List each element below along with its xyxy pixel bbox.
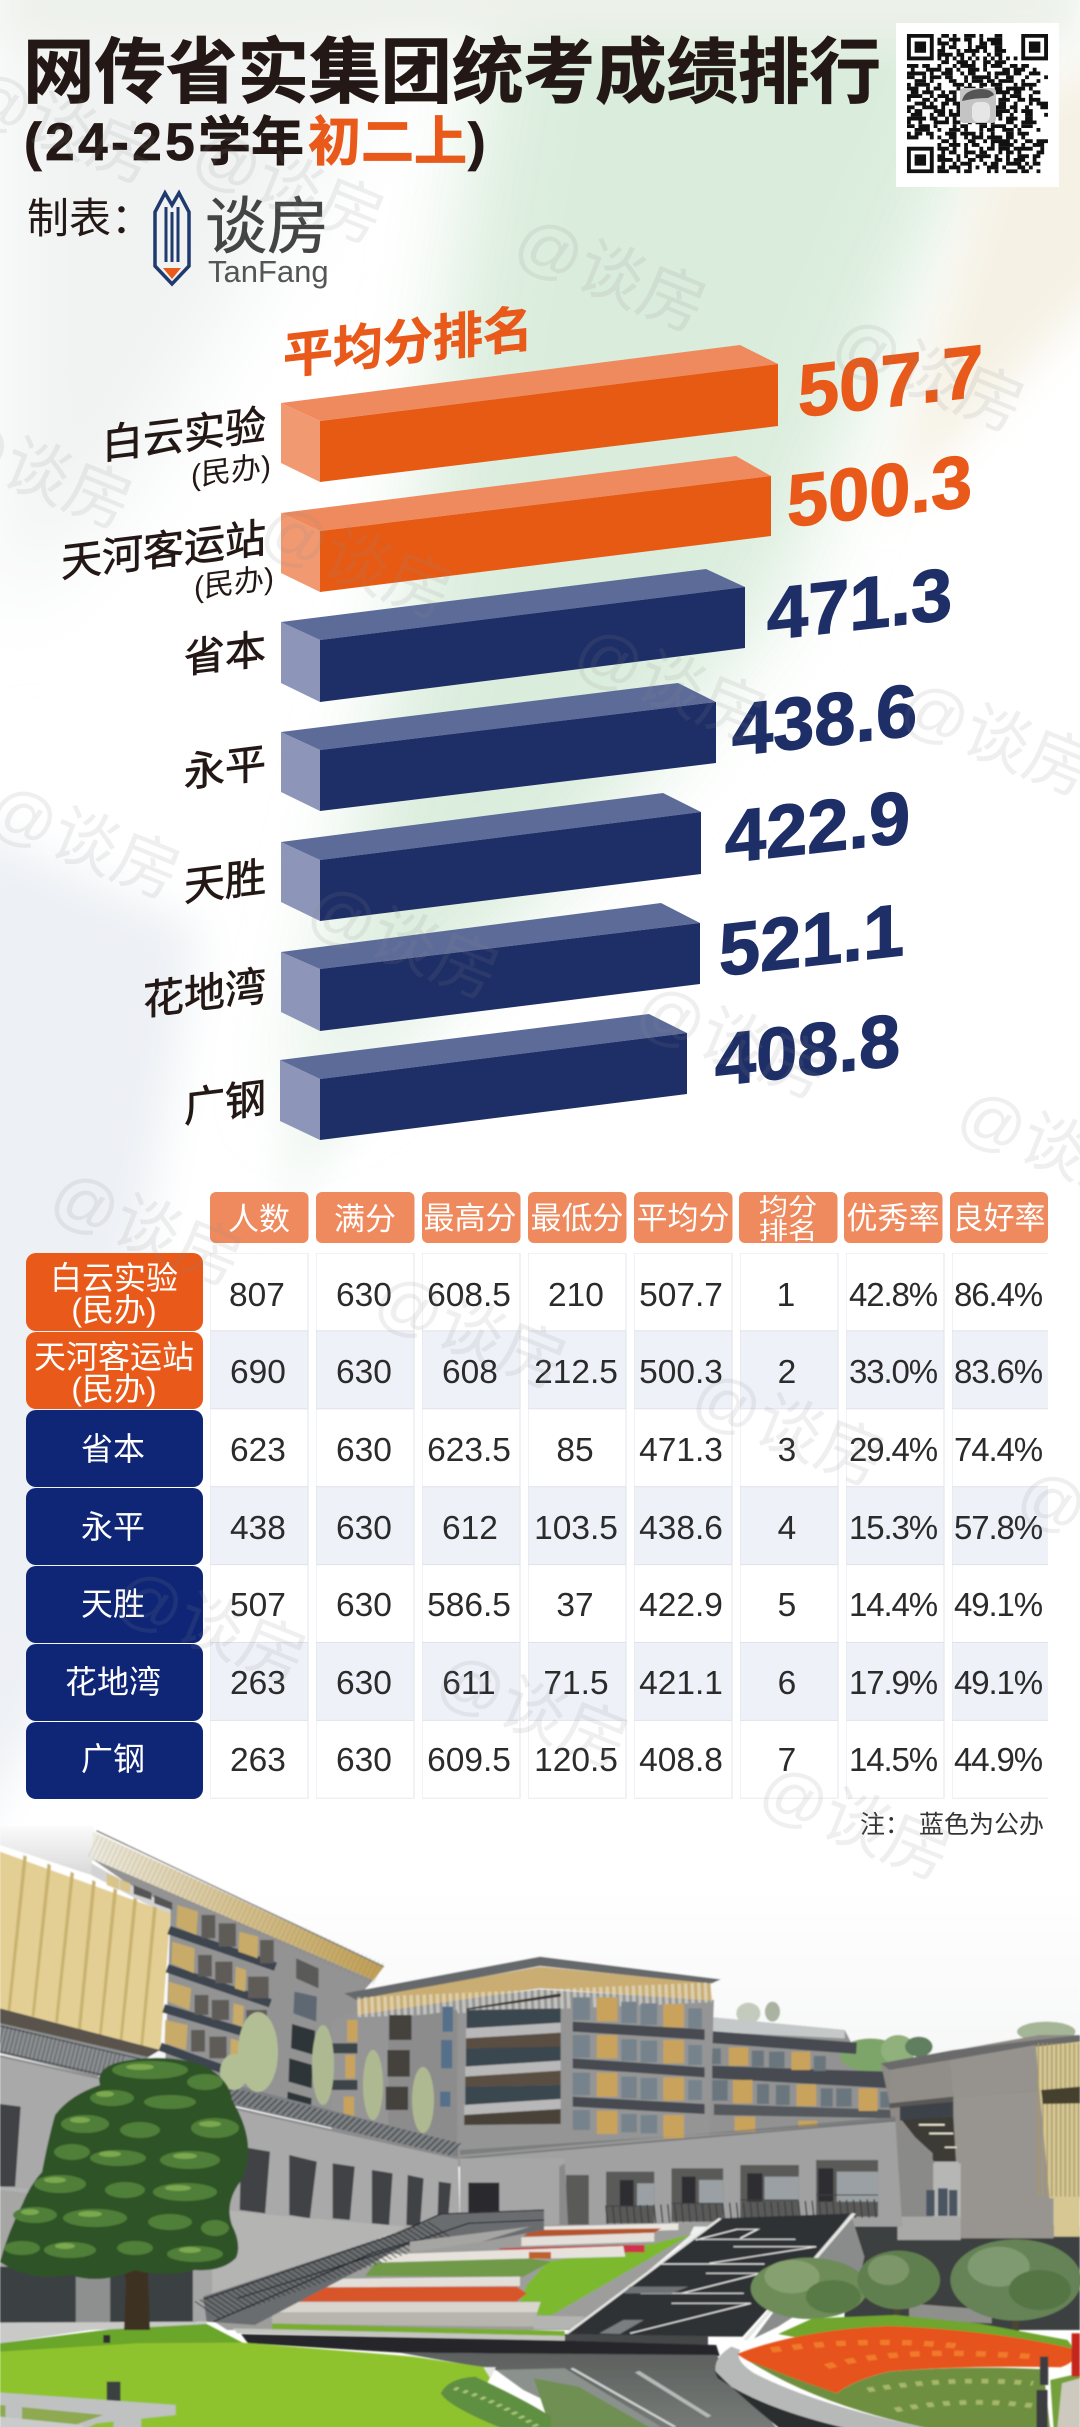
table row names: 永平: [81, 1509, 145, 1545]
table header: 优秀率: [846, 1201, 940, 1236]
table values: 623: [230, 1432, 286, 1469]
table values: 120.5: [534, 1742, 618, 1779]
left wing: [0, 2056, 460, 2228]
lawn: [0, 2324, 506, 2427]
bar values: [715, 329, 983, 1102]
table header: 人数: [228, 1202, 290, 1237]
table values: 37: [556, 1587, 594, 1624]
table values: 42.8%: [849, 1276, 938, 1313]
water: [399, 2353, 778, 2427]
pool edge: [233, 2328, 565, 2341]
foreground landscape: [0, 2239, 1080, 2427]
table values: 6: [778, 1665, 796, 1702]
subtitle: [24, 113, 486, 172]
table values: 85: [556, 1432, 594, 1469]
flower bed: [778, 2314, 1073, 2350]
table values: 630: [336, 1510, 392, 1547]
watermarks: [0, 54, 1080, 1894]
bar labels: 天河客运站: [61, 515, 266, 586]
centre wall: [460, 2158, 466, 2160]
table row names: [26, 1253, 203, 1799]
distant trees: [736, 2002, 1076, 2072]
table values: 630: [336, 1742, 392, 1779]
table values: 57.8%: [954, 1509, 1043, 1546]
bar labels: 白云实验: [102, 402, 266, 468]
title: 网传省实集团统考成绩排行: [23, 33, 881, 113]
right podium beam: [460, 2120, 902, 2227]
watermarks: @谈房: [750, 1750, 962, 1894]
campus photo: [0, 1820, 1080, 2427]
table header: 良好率: [952, 1201, 1046, 1236]
table values: 14.5%: [849, 1741, 938, 1778]
table header: 最高分: [424, 1201, 516, 1236]
white terrace steps: [543, 2222, 680, 2232]
subtitle: 学年: [198, 113, 304, 172]
green slope: [520, 2234, 692, 2316]
table header: 最低分: [530, 1201, 624, 1236]
watermarks: @谈房: [427, 1638, 639, 1782]
table values: 33.0%: [849, 1353, 938, 1390]
table values: 507.7: [639, 1277, 723, 1314]
table row names: 天胜: [81, 1586, 145, 1622]
table values: 1: [777, 1277, 795, 1314]
table values: 586.5: [427, 1587, 511, 1624]
table values: 438.6: [639, 1510, 723, 1547]
table body cells: [210, 1253, 1048, 1798]
table values: 263: [230, 1665, 286, 1702]
table row names: (民办): [71, 1292, 157, 1328]
table header: 平均分: [636, 1201, 730, 1236]
table row names: 花地湾: [65, 1664, 161, 1700]
railing: [0, 2393, 176, 2427]
logo: TanFang pencil: [155, 193, 329, 289]
bar labels: 广钢: [184, 1075, 266, 1131]
footnote: 注：: [860, 1811, 910, 1839]
table values: 44.9%: [954, 1741, 1043, 1778]
table values: 83.6%: [954, 1353, 1043, 1390]
bar labels: 省本: [184, 626, 266, 682]
bar: 省本 471.3: [281, 569, 745, 702]
watermarks: @谈房: [298, 869, 510, 1013]
table values: 807: [229, 1277, 285, 1314]
big pine tree: [0, 2058, 248, 2330]
watermarks: @谈房: [105, 1554, 317, 1698]
subtitle: ): [468, 113, 486, 172]
chart heading: 平均分排名: [283, 301, 533, 385]
watermarks: @谈房: [365, 1259, 577, 1403]
table values: 612: [442, 1510, 498, 1547]
bar labels: 永平: [184, 740, 266, 796]
table values: 500.3: [639, 1354, 723, 1391]
table row names: (民办): [71, 1371, 157, 1407]
table row names: 白云实验: [50, 1260, 178, 1296]
dark wall behind right trees: [844, 2213, 1080, 2330]
bar: 白云实验 507.7: [281, 345, 778, 482]
bar: 永平 438.6: [281, 683, 716, 811]
bar labels: 花地湾: [143, 963, 266, 1024]
bar values: 422.9: [725, 775, 910, 879]
table values: 611: [442, 1665, 496, 1702]
watermarks: @谈房: [505, 202, 717, 346]
watermarks: @谈房: [251, 489, 463, 633]
bar values: 408.8: [715, 998, 900, 1102]
table values: 608: [442, 1354, 498, 1391]
table values: 630: [336, 1432, 392, 1469]
table values: 49.1%: [954, 1586, 1043, 1623]
window grid: [160, 1930, 276, 2073]
right brick lower: [957, 2198, 1054, 2238]
footnote: 蓝色为公办: [919, 1811, 1044, 1839]
table values: 210: [548, 1277, 604, 1314]
bar labels: (民办): [191, 450, 271, 493]
bar values: 521.1: [719, 888, 904, 992]
subtitle: 初二上: [308, 113, 467, 172]
table values: 17.9%: [849, 1664, 938, 1701]
bar: 广钢 408.8: [280, 1014, 687, 1140]
table header: 满分: [334, 1202, 396, 1237]
bar values: 471.3: [767, 552, 952, 656]
podium and terraces: [0, 2056, 1080, 2356]
table values: 5: [778, 1587, 796, 1624]
table values: 507: [230, 1587, 286, 1624]
table values: 263: [230, 1742, 286, 1779]
subtitle: (24-25: [24, 113, 198, 172]
centre building: [332, 1957, 1080, 2200]
table values: 86.4%: [954, 1276, 1043, 1313]
bar: 天河客运站 500.3: [281, 456, 771, 592]
QR code: [896, 23, 1059, 187]
table values: 71.5: [543, 1665, 609, 1702]
table values: 212.5: [534, 1354, 618, 1391]
terrace backing: [207, 2223, 696, 2330]
table values: 630: [336, 1354, 392, 1391]
bar values: 507.7: [798, 329, 983, 433]
bar labels: [61, 402, 274, 1131]
watermarks: @谈房: [183, 114, 395, 258]
table values: 630: [336, 1587, 392, 1624]
bar values: 500.3: [787, 439, 972, 543]
gold fins: [0, 1852, 170, 2050]
table values: 609.5: [427, 1742, 511, 1779]
people: [926, 2188, 957, 2216]
bar labels: (民办): [194, 562, 274, 605]
posts and red figure: [1040, 2357, 1048, 2385]
table header: 均分: [759, 1193, 817, 1220]
table values: 608.5: [427, 1277, 511, 1314]
table values: [229, 1276, 1043, 1779]
table values: 630: [336, 1277, 392, 1314]
background gradient swashes: [0, 0, 1080, 1900]
watermarks: @谈房: [627, 969, 839, 1113]
table row names: 天河客运站: [34, 1339, 194, 1375]
table values: 421.1: [639, 1665, 723, 1702]
table header: [210, 1192, 1048, 1244]
right brick wing: [881, 2035, 1080, 2200]
logo: TanFang pencil: TanFang: [208, 254, 329, 289]
black water cascade: [565, 2213, 854, 2337]
table values: 690: [230, 1354, 286, 1391]
table values: 4: [778, 1510, 796, 1547]
small trees: [894, 2310, 1020, 2332]
stairs: [203, 2209, 544, 2325]
lower dark garage: [0, 2266, 196, 2324]
table values: 2: [778, 1354, 796, 1391]
table values: 103.5: [534, 1510, 618, 1547]
balconies: [464, 1993, 561, 2125]
hedge strip: [441, 2377, 551, 2427]
table values: 74.4%: [954, 1431, 1043, 1468]
table row names: 省本: [81, 1431, 145, 1467]
main block: [332, 1989, 714, 2167]
left tall building: [0, 1820, 384, 2120]
watermarks: @谈房: [823, 302, 1035, 446]
table values: 49.1%: [954, 1664, 1043, 1701]
table row names: 广钢: [81, 1741, 145, 1777]
stone curb: [715, 2347, 937, 2427]
pale columnar trees: [220, 2012, 434, 2133]
table values: 471.3: [639, 1432, 723, 1469]
table header: 排名: [759, 1217, 817, 1244]
bar labels: 天胜: [184, 854, 266, 910]
table values: 438: [230, 1510, 286, 1547]
watermarks: @谈房: [41, 1156, 253, 1300]
watermarks: @谈房: [565, 612, 777, 756]
bar values: 438.6: [732, 668, 917, 772]
table values: 3: [778, 1432, 796, 1469]
logo: TanFang pencil: 谈房: [205, 193, 329, 262]
watermarks: @谈房: [683, 1356, 895, 1500]
bar: 花地湾 521.1: [281, 903, 700, 1031]
table values: 408.8: [639, 1742, 723, 1779]
table values: 422.9: [639, 1587, 723, 1624]
table values: 630: [336, 1665, 392, 1702]
table values: 15.3%: [849, 1509, 938, 1546]
3D bar chart: [280, 345, 778, 1140]
table values: 14.4%: [849, 1586, 938, 1623]
credit label: 制表：: [27, 195, 153, 242]
table values: 623.5: [427, 1432, 511, 1469]
table values: 7: [778, 1742, 796, 1779]
table values: 29.4%: [849, 1431, 938, 1468]
bar: 天胜 422.9: [281, 793, 701, 921]
